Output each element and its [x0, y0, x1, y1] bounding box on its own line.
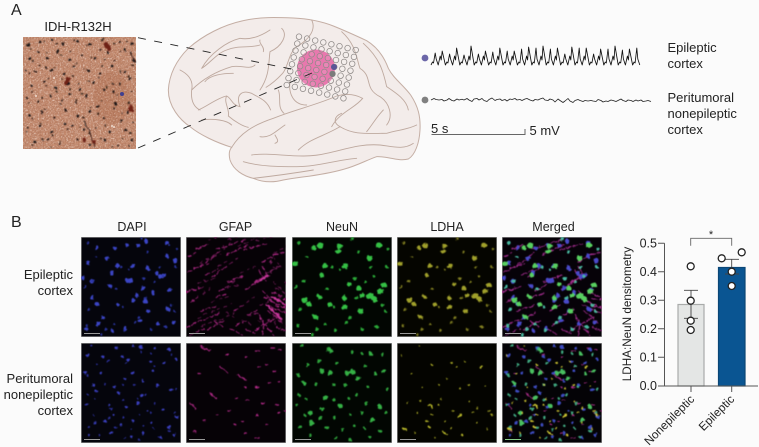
- column headings: DAPI: [117, 220, 147, 234]
- micrograph: GFAP epileptic: [186, 237, 286, 337]
- trace label: peritumoral cortex: nonepileptic: [668, 106, 737, 121]
- micrograph: LDHA epileptic: [397, 237, 497, 337]
- brain lobes and sulci: [168, 17, 420, 182]
- legend dot: epileptic trace: [422, 55, 428, 61]
- panel label B: B: [11, 214, 22, 231]
- y axis tick labels: 0.2: [640, 322, 657, 336]
- bar: nonepileptic: [678, 304, 704, 386]
- y axis tick labels: 0.3: [640, 294, 657, 308]
- histology heading: IDH-R132H: [44, 19, 112, 34]
- micrograph: DAPI epileptic: [81, 237, 181, 337]
- illustration: brain with electrode grid: [168, 17, 420, 182]
- micrograph: DAPI peritumoral: [81, 343, 181, 443]
- bar: epileptic: [718, 268, 745, 386]
- recording electrode: epileptic: [331, 64, 337, 70]
- zoom guide lines from micrograph to brain: [138, 38, 312, 148]
- row label: epileptic cortex: cortex: [38, 283, 73, 298]
- EEG trace: epileptic cortex: [431, 46, 640, 65]
- y axis tick labels: [640, 236, 657, 393]
- error bars: [684, 259, 739, 318]
- row label: peritumoral cortex: [4, 371, 73, 418]
- micrograph: NeuN peritumoral: [292, 343, 392, 443]
- row label: peritumoral cortex: cortex: [38, 403, 73, 418]
- micrograph: merged peritumoral: [502, 343, 602, 443]
- micrograph: NeuN epileptic: [292, 237, 392, 337]
- row label: epileptic cortex: Epileptic: [24, 267, 73, 282]
- column headings: GFAP: [219, 220, 252, 234]
- x axis labels: [641, 392, 737, 447]
- column headings: NeuN: [326, 220, 358, 234]
- scale bar with labels: [431, 121, 560, 138]
- legend dot: peritumoral trace: [422, 97, 428, 103]
- x axis labels: Epileptic: [696, 392, 737, 434]
- column headings: [117, 220, 575, 234]
- y axis tick labels: 0.5: [640, 236, 657, 250]
- scale bar with labels: 5 mV: [530, 123, 560, 138]
- y axis title: LDHA:NeuN densitometry: [621, 247, 634, 381]
- y axis tick labels: 0.1: [640, 350, 657, 364]
- bar chart: LDHA:NeuN densitometry: [621, 229, 758, 447]
- scale bar with labels: 5 s: [431, 121, 449, 136]
- column headings: Merged: [532, 220, 575, 234]
- lesion: pink epileptic zone: [297, 50, 335, 88]
- histology micrograph: [23, 37, 136, 149]
- y axis tick labels: 0.4: [640, 265, 657, 279]
- micrograph: GFAP peritumoral: [186, 343, 286, 443]
- micrograph: merged epileptic: [502, 237, 602, 337]
- x axis labels: Nonepileptic: [641, 392, 697, 447]
- EEG trace: peritumoral cortex: [431, 98, 651, 102]
- axes: [658, 243, 758, 392]
- row label: peritumoral cortex: nonepileptic: [4, 387, 73, 402]
- y axis tick labels: 0.0: [640, 379, 657, 393]
- micrograph: LDHA peritumoral: [397, 343, 497, 443]
- row label: peritumoral cortex: Peritumoral: [7, 371, 73, 386]
- trace label: peritumoral cortex: [668, 90, 737, 137]
- recording electrode: peritumoral: [330, 71, 336, 77]
- data points: [687, 249, 745, 334]
- column headings: LDHA: [430, 220, 464, 234]
- significance bracket: [691, 238, 732, 246]
- trace label: epileptic cortex: [668, 40, 717, 71]
- significance star: *: [709, 229, 714, 241]
- trace label: peritumoral cortex: cortex: [668, 122, 703, 137]
- trace label: epileptic cortex: cortex: [668, 56, 703, 71]
- trace label: epileptic cortex: Epileptic: [668, 40, 717, 55]
- trace label: peritumoral cortex: Peritumoral: [668, 90, 734, 105]
- panel label A: A: [11, 2, 22, 19]
- electrode grid: [284, 34, 358, 101]
- row label: epileptic cortex: [24, 267, 73, 298]
